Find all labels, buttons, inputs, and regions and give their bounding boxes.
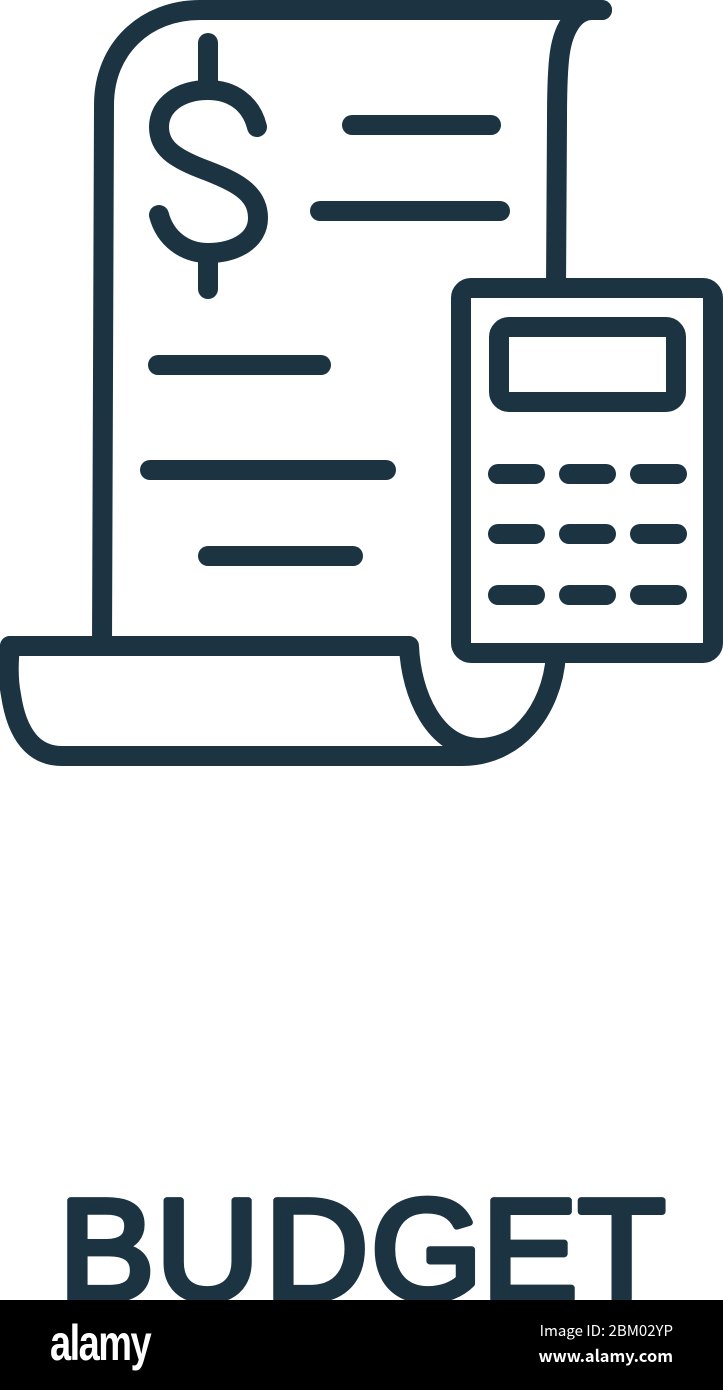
text lines on paper	[150, 125, 500, 556]
icon: calculator	[461, 288, 713, 653]
footer bar	[0, 1300, 723, 1390]
icon: dollar sign	[159, 43, 258, 289]
website: www.alamy.com	[538, 1343, 673, 1367]
image id: Image ID: 2BM02YP	[540, 1320, 673, 1341]
footer logo: alamy	[50, 1315, 150, 1371]
icon: budget document with calculator	[0, 0, 723, 766]
paper scroll outline	[9, 10, 602, 756]
